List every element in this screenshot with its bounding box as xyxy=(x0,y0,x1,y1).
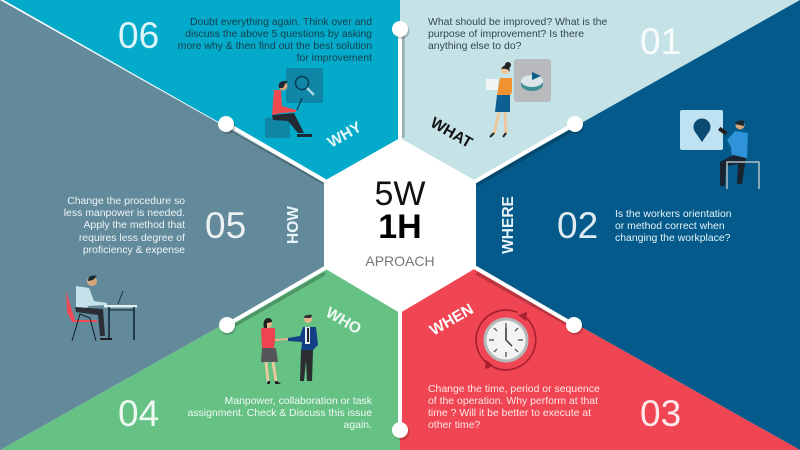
text: why: for improvement xyxy=(297,53,372,64)
text: who: assignment. Check & Discuss this issue xyxy=(188,408,372,419)
center title: APROACH xyxy=(365,253,435,269)
text: where: changing the workplace? xyxy=(615,233,731,244)
text: what: What should be improved? What is the xyxy=(428,17,607,28)
label why: WHY xyxy=(325,118,365,152)
text: when: time ? Will it be better to execute at xyxy=(428,408,591,419)
text: who: Manpower, collaboration or task xyxy=(225,396,373,407)
number 06: 06 xyxy=(118,15,159,56)
label what: WHAT xyxy=(427,114,476,152)
text: when: of the operation. Why perform at that xyxy=(428,396,598,407)
panel: what background xyxy=(400,0,800,225)
text: where: Is the workers orientation xyxy=(615,209,732,220)
text: how: requires less degree of xyxy=(79,233,185,244)
icon: person with magnifier xyxy=(265,68,323,138)
icon: handshake xyxy=(261,315,318,384)
center title xyxy=(365,175,435,269)
central hexagon xyxy=(324,138,476,313)
panel: how background xyxy=(0,0,400,450)
panel: where background xyxy=(400,0,800,450)
label when: WHEN xyxy=(427,301,477,339)
center title: 5W xyxy=(374,175,426,213)
label where: WHERE xyxy=(500,196,517,254)
icon: person at desk xyxy=(66,276,137,341)
text: when: other time? xyxy=(428,420,480,431)
text: who: again. xyxy=(344,420,372,431)
text: when: Change the time, period or sequence xyxy=(428,384,600,395)
label who: WHO xyxy=(323,304,364,338)
text: how: less manpower is needed. xyxy=(64,208,185,219)
panel: who background xyxy=(0,225,400,450)
icon: clock xyxy=(476,310,536,370)
icon: man with map pin xyxy=(680,110,759,189)
text: why: discuss the above 5 questions by asking xyxy=(185,29,372,40)
number 05: 05 xyxy=(205,205,246,246)
text: what: purpose of improvement? Is there xyxy=(428,29,584,40)
text: how: Apply the method that xyxy=(83,220,185,231)
panel: why background xyxy=(0,0,400,225)
text: why: Doubt everything again. Think over and xyxy=(190,17,372,28)
text: why: more why & then find out the best solution xyxy=(178,41,372,52)
number 04: 04 xyxy=(118,393,159,434)
text: how: Change the procedure so xyxy=(67,196,185,207)
connector nodes xyxy=(218,21,584,440)
center title: 1H xyxy=(378,208,422,246)
connector lines xyxy=(227,28,576,430)
icon: woman with pie chart xyxy=(486,59,551,137)
number 03: 03 xyxy=(640,393,681,434)
label how: HOW xyxy=(285,206,302,244)
panel: when background xyxy=(400,225,800,450)
text: where: or method correct when xyxy=(615,221,725,232)
text: what: anything else to do? xyxy=(428,41,522,52)
number 02: 02 xyxy=(557,205,598,246)
text: how: proficiency & expense xyxy=(83,245,185,256)
number 01: 01 xyxy=(640,21,681,62)
